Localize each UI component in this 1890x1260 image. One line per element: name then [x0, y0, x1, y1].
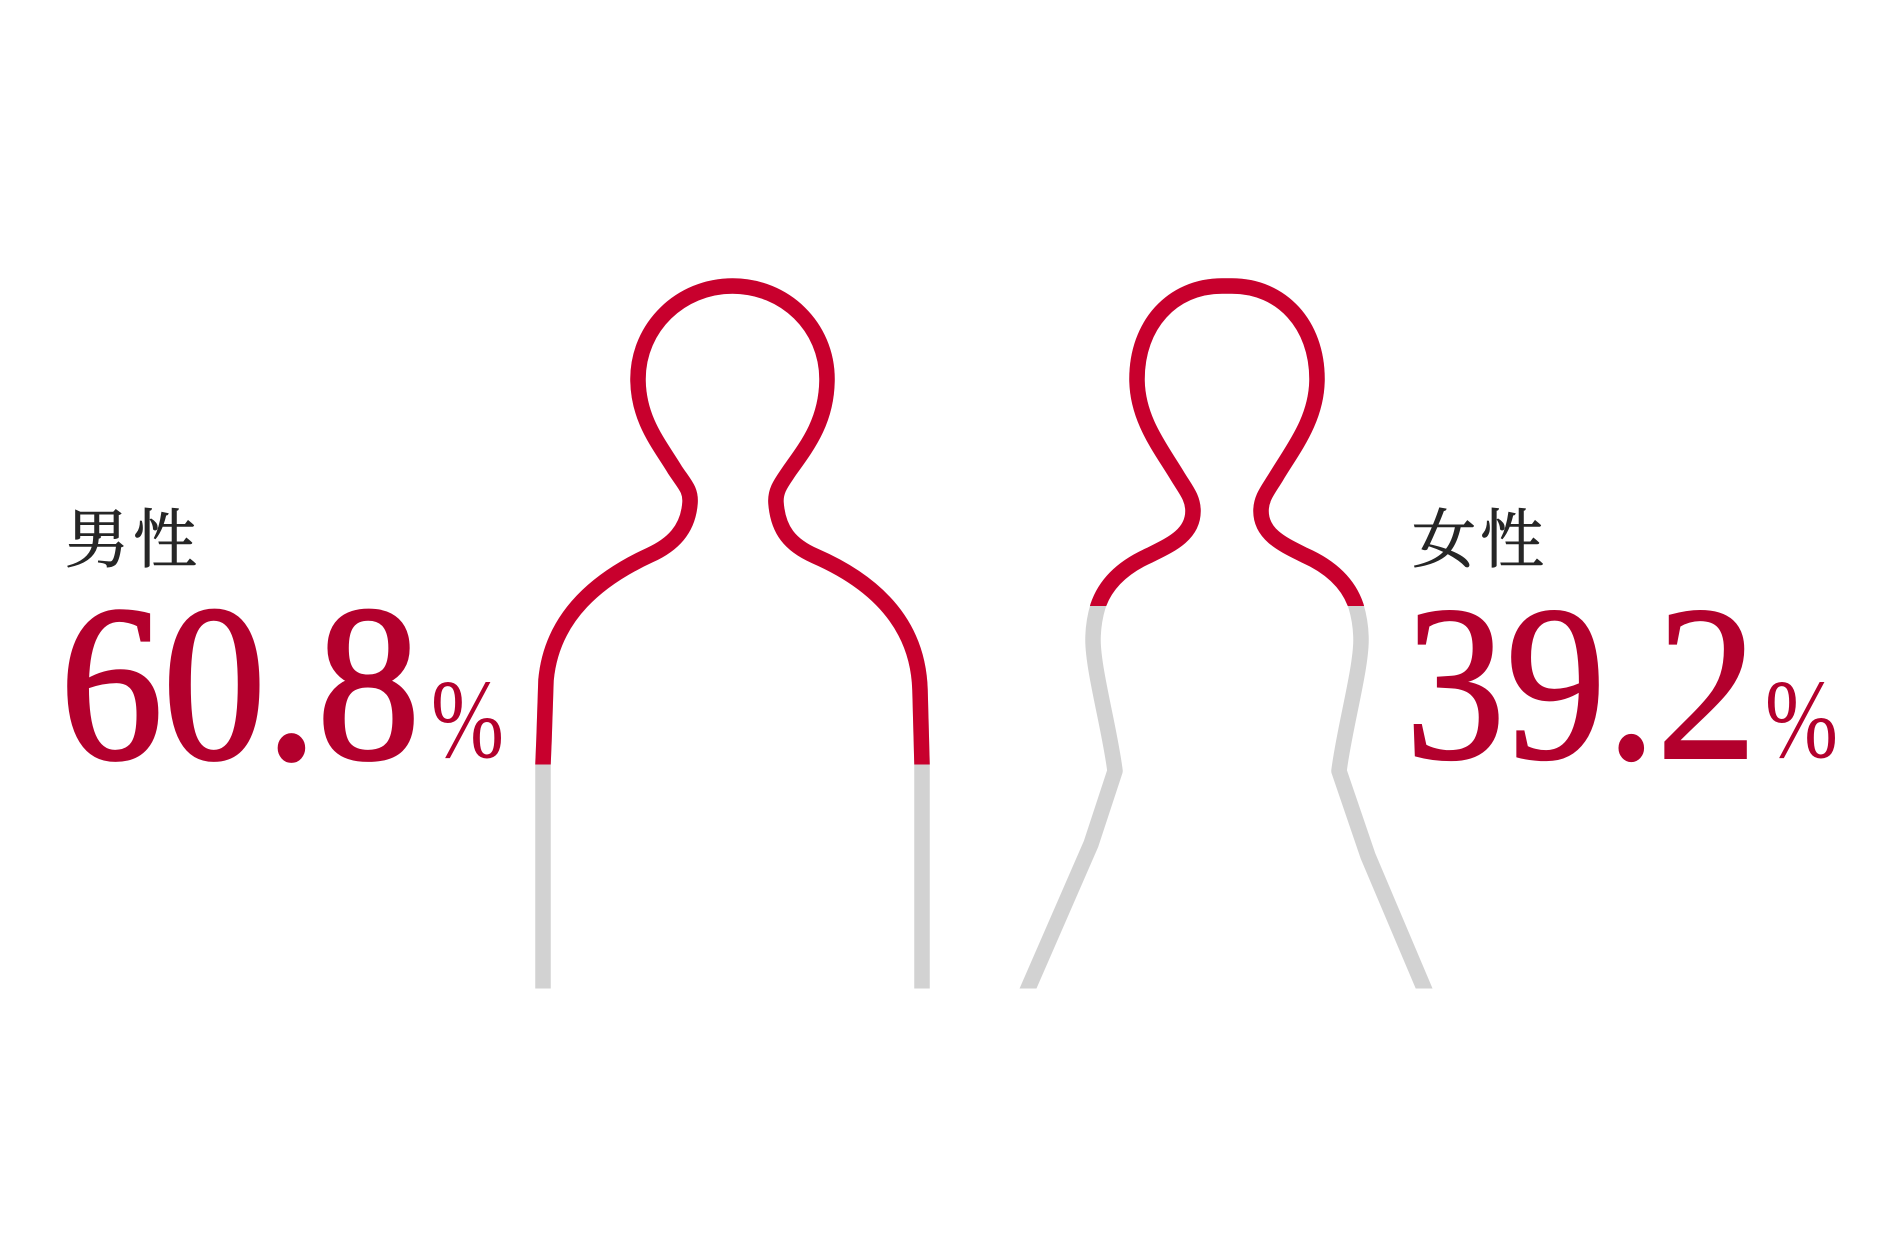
- heading: female label: 女性: [1412, 505, 1544, 576]
- infographic canvas: [67, 278, 1835, 988]
- panel: male: [60, 286, 922, 1000]
- stat: male percentage: 60.8: [60, 561, 420, 807]
- stat: male percentage: %: [431, 658, 504, 782]
- panel: female: [1023, 286, 1838, 1000]
- heading: male label: 男性: [65, 505, 197, 576]
- icon: female silhouette, 39.2% filled: [1023, 286, 1429, 1000]
- stat: female percentage: 39.2: [1405, 561, 1757, 807]
- icon: male silhouette, 60.8% filled: [543, 286, 922, 1000]
- stat: female percentage: %: [1765, 658, 1838, 782]
